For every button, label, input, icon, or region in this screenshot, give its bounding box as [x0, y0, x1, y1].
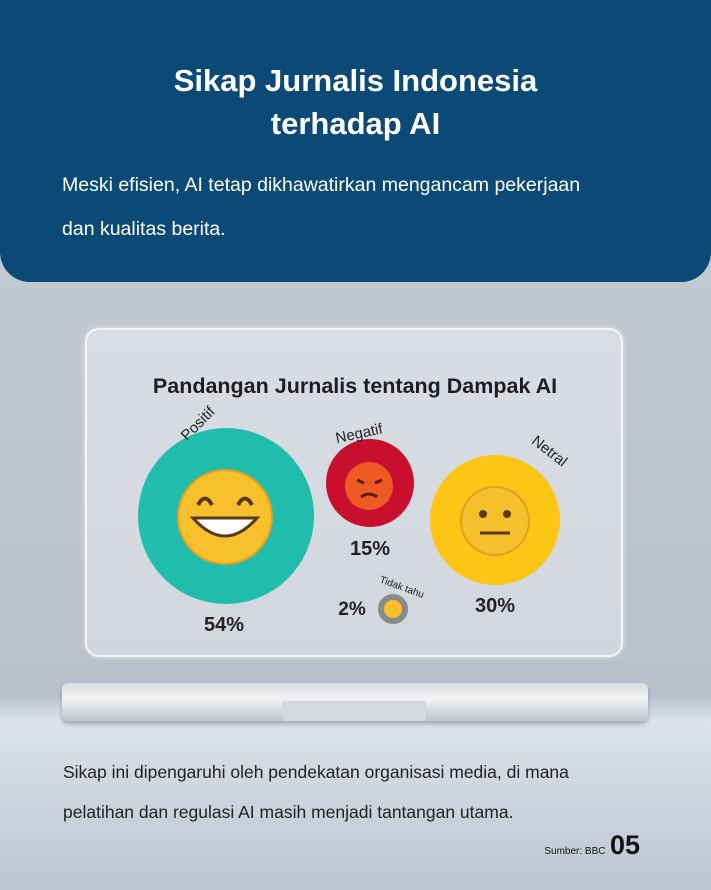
screen panel	[85, 328, 623, 657]
header panel	[0, 0, 711, 282]
subtitle	[62, 174, 580, 240]
title	[174, 63, 538, 141]
bubble: positif: Positif	[178, 403, 219, 444]
keyboard base	[62, 683, 648, 721]
bottom text	[63, 762, 569, 822]
bubble: netral	[430, 432, 570, 617]
source and page number: Sumber: BBC 05	[544, 830, 640, 860]
bubble: positif	[138, 403, 314, 636]
chart title: Pandangan Jurnalis tentang Dampak AI	[153, 374, 557, 398]
bottom text: Sikap ini dipengaruhi oleh pendekatan organisasi media, di mana	[63, 762, 569, 782]
bottom text: pelatihan dan regulasi AI masih menjadi tantangan utama.	[63, 802, 513, 822]
bubble: tidak tahu: Tidak tahu	[378, 575, 425, 601]
bubble: tidak tahu: 2%	[338, 599, 366, 620]
bubble: negatif: 15%	[350, 538, 390, 560]
bubble: negatif	[326, 420, 414, 560]
bubble: netral: 30%	[475, 595, 515, 617]
title: Sikap Jurnalis Indonesia	[174, 63, 537, 98]
bubble: negatif: Negatif	[334, 420, 385, 447]
bubble: positif: 54%	[204, 614, 244, 636]
bubble: tidak tahu	[338, 575, 425, 624]
title: terhadap AI	[271, 106, 440, 141]
subtitle: dan kualitas berita.	[62, 218, 226, 240]
subtitle: Meski efisien, AI tetap dikhawatirkan mengancam pekerjaan	[62, 174, 580, 196]
bubble: netral: Netral	[528, 432, 570, 470]
